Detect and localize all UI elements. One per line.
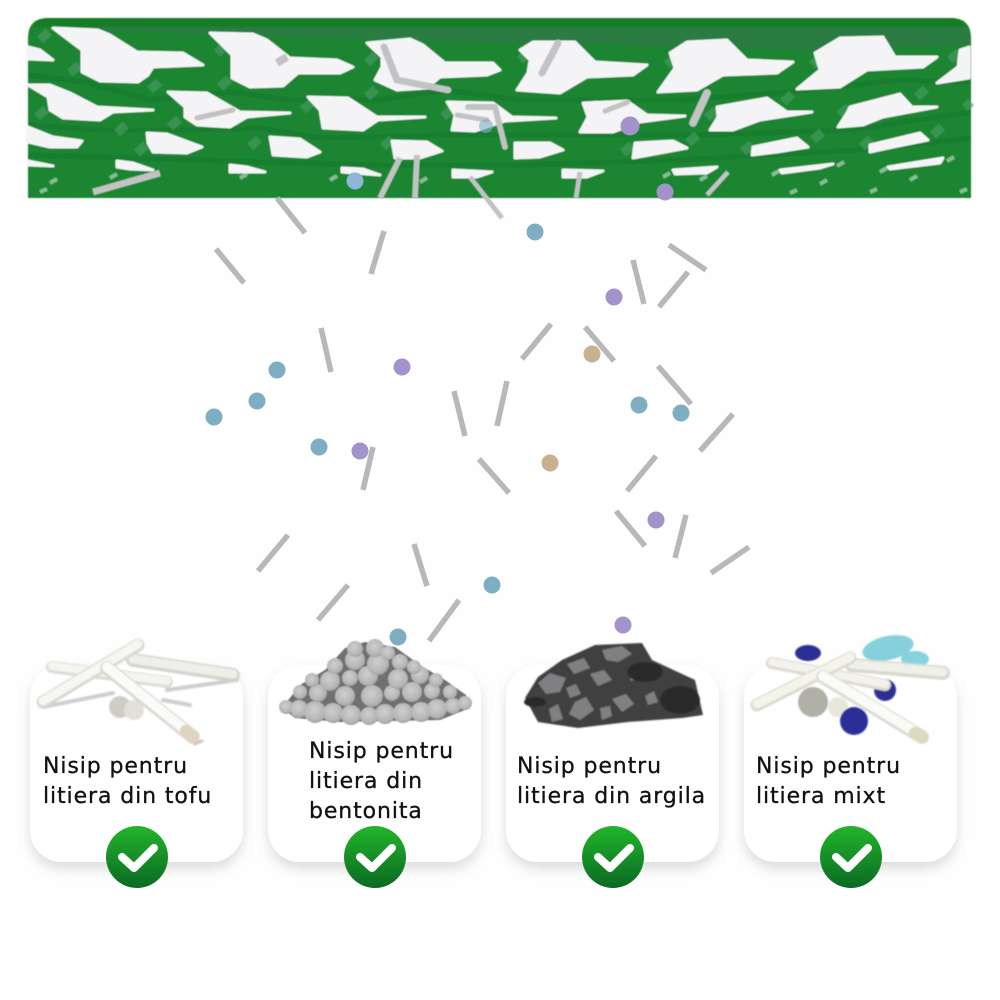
filter mesh panel	[28, 18, 971, 198]
icon: check mark	[582, 826, 644, 888]
icon: check mark	[344, 826, 406, 888]
label: litiera din	[309, 769, 423, 794]
label: Nisip pentru	[756, 754, 901, 779]
label: Nisip pentru	[309, 739, 454, 764]
image: bentonite pile	[279, 639, 472, 725]
card: tofu litter	[30, 644, 243, 888]
image: clay pile	[524, 643, 703, 728]
label	[43, 754, 212, 809]
card: bentonite litter	[268, 639, 481, 888]
label: litiera din tofu	[43, 784, 212, 809]
label: litiera din argila	[517, 784, 706, 809]
falling rods	[216, 198, 749, 641]
image: mixed litter	[757, 631, 943, 737]
label	[309, 739, 454, 824]
icon: check mark	[106, 826, 168, 888]
label	[517, 754, 706, 809]
label	[756, 754, 901, 809]
card: clay litter	[506, 643, 719, 888]
falling tan particles	[542, 346, 600, 472]
label: bentonita	[309, 799, 423, 824]
label: Nisip pentru	[517, 754, 662, 779]
falling blue particles	[206, 119, 690, 646]
label: Nisip pentru	[43, 754, 188, 779]
image: tofu sticks	[43, 644, 237, 744]
icon: check mark	[820, 826, 882, 888]
rods on the mesh	[93, 43, 728, 218]
card: mixed litter	[744, 631, 957, 888]
label: litiera mixt	[756, 784, 886, 809]
falling purple particles	[352, 116, 674, 634]
